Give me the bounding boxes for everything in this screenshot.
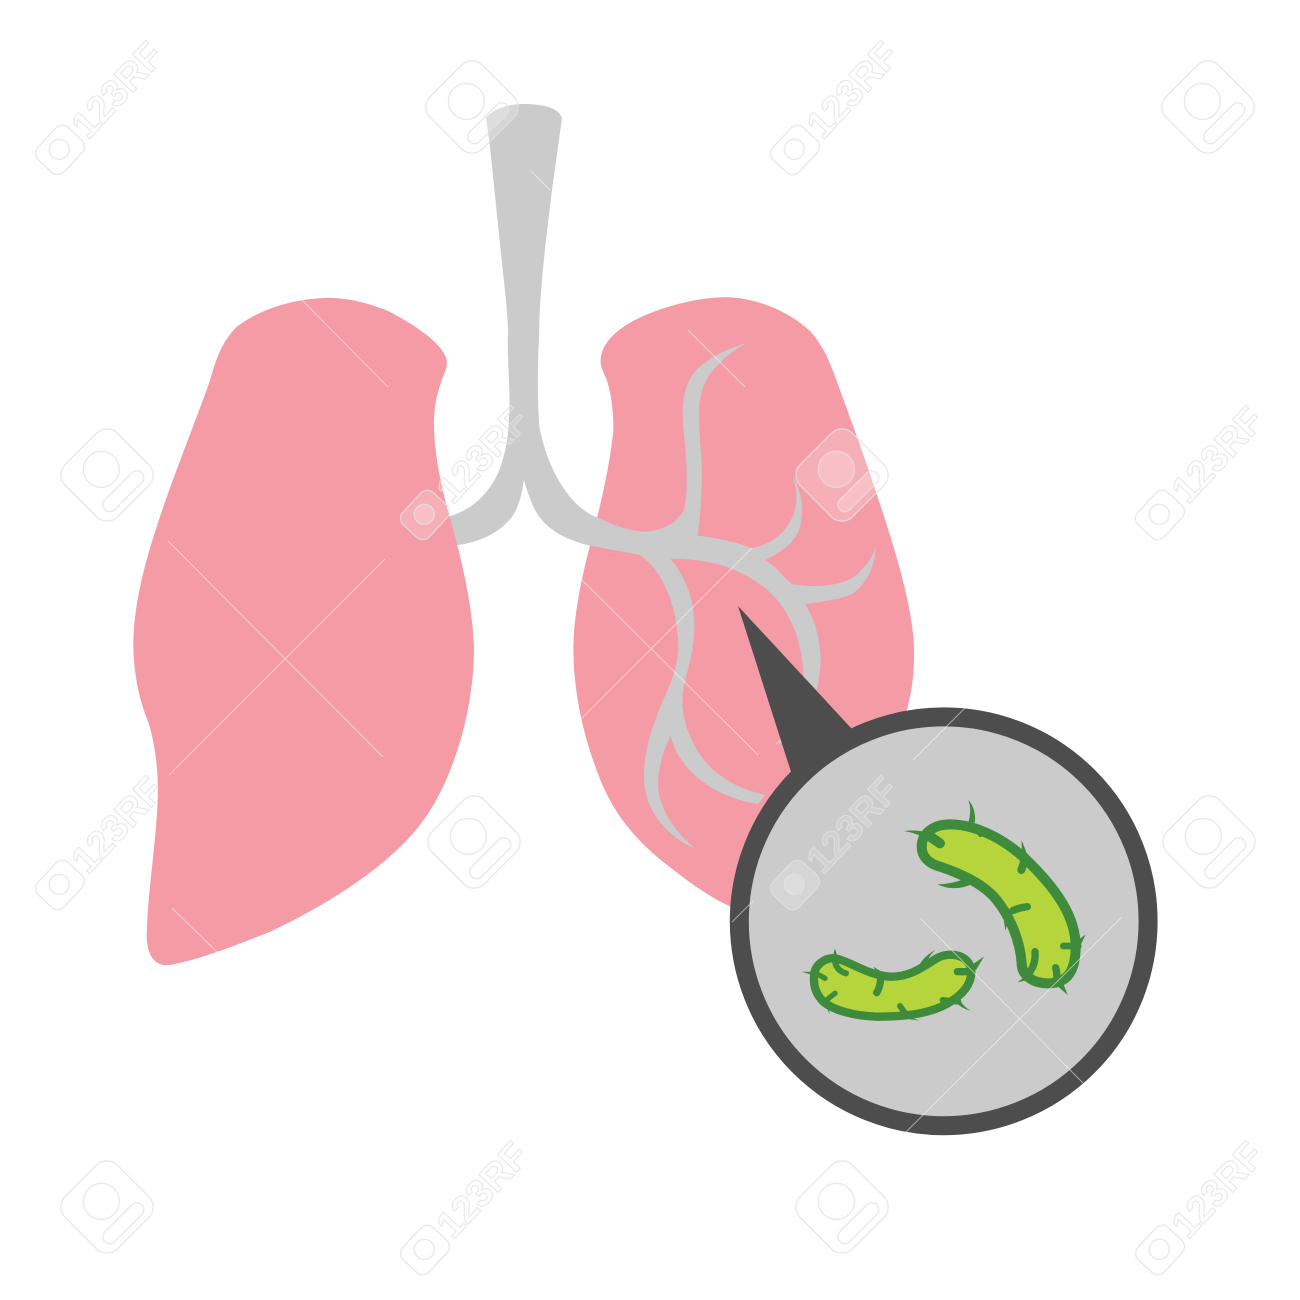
- watermark: camera logo 2: [1156, 55, 1260, 159]
- small bacterium: [802, 948, 984, 1021]
- watermark: text mark 3: 123RF: [429, 400, 537, 512]
- watermark: text mark 5: 123RF: [64, 770, 172, 882]
- watermark crossing lines: [168, 171, 1122, 1132]
- watermark: text mark 8: 123RF: [1164, 1135, 1272, 1247]
- magnifier callout: [738, 606, 1148, 1126]
- watermark: text mark 2: [766, 35, 907, 182]
- watermark: text mark 6: [766, 770, 907, 917]
- watermark: text mark 8: [1131, 1135, 1272, 1282]
- watermark: camera logo 5: [422, 790, 526, 894]
- watermark: text mark 6: 123RF: [799, 770, 907, 882]
- watermark: camera logo 1: [420, 55, 524, 159]
- watermark: text mark 1: [31, 35, 172, 182]
- trachea and bronchial tree: [437, 104, 876, 848]
- watermark: camera logo 8: [790, 1155, 894, 1259]
- large bacterium: [904, 800, 1086, 995]
- bacteria: [802, 800, 1086, 1021]
- watermark: text mark 1: 123RF: [64, 35, 172, 147]
- magnifier circle: [739, 717, 1148, 1126]
- watermark: text mark 3: [396, 400, 537, 547]
- watermark: text mark 5: [31, 770, 172, 917]
- watermark: camera logo 3: [55, 423, 159, 527]
- watermark: text mark 4: 123RF: [1164, 400, 1272, 512]
- watermark: text mark 4: [1131, 400, 1272, 547]
- right lung (image right): [573, 297, 914, 906]
- watermark: text mark 7: 123RF: [429, 1135, 537, 1247]
- callout pointer: [738, 606, 880, 800]
- watermark: text mark 2: 123RF: [799, 35, 907, 147]
- watermark: text mark 7: [396, 1135, 537, 1282]
- watermark: camera logo 6: [1157, 790, 1261, 894]
- left lung (image left): [133, 298, 474, 965]
- watermark: camera logo 4: [790, 423, 894, 527]
- watermark: camera logo 7: [55, 1155, 159, 1259]
